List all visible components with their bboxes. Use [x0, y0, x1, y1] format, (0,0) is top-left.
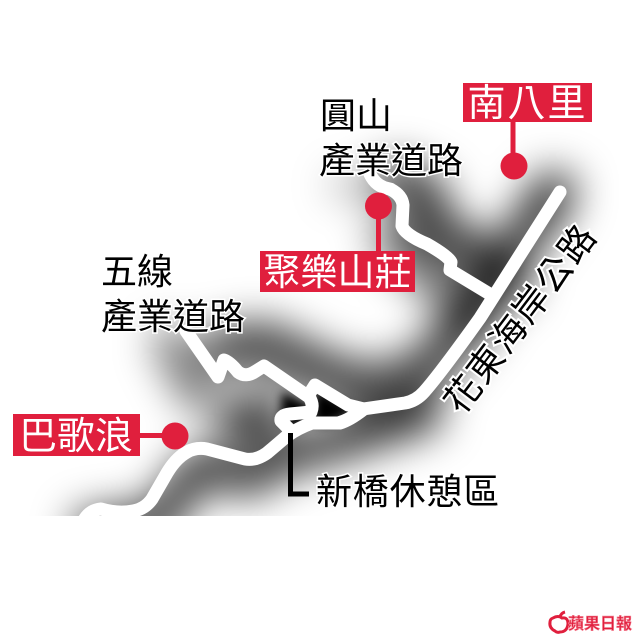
logo: Apple Daily: [550, 612, 632, 633]
icon: apple: [550, 612, 568, 632]
coastal highway and southern road: [84, 192, 560, 520]
text: 產業道路: [101, 296, 245, 337]
heading: Wuxian road: 五線: [101, 251, 173, 292]
heading: Yuanshan road: 圓山: [320, 95, 392, 136]
label: Nanbali: [463, 83, 592, 180]
label: Bagelang: [13, 414, 188, 458]
Xinqiao rest area loop: [308, 385, 364, 423]
road shadows: [90, 181, 565, 530]
label: Juleshanzhuang: 聚樂山莊: [264, 252, 412, 293]
roads: [84, 174, 560, 520]
logo: Apple Daily: 蘋果日報: [568, 615, 632, 633]
label: Bagelang: 巴歌浪: [19, 416, 133, 458]
Yuanshan industrial road: [370, 174, 493, 296]
label: Juleshanzhuang: [260, 192, 415, 293]
callout: Xinqiao rest area: [290, 433, 500, 512]
label: East Coast Highway: 花東海岸公路: [436, 216, 605, 421]
label: Nanbali: 南八里: [467, 83, 588, 125]
Wuxian industrial road: [186, 331, 312, 431]
callout: Xinqiao rest area: 新橋休憩區: [316, 471, 500, 512]
text: 產業道路: [319, 140, 463, 181]
